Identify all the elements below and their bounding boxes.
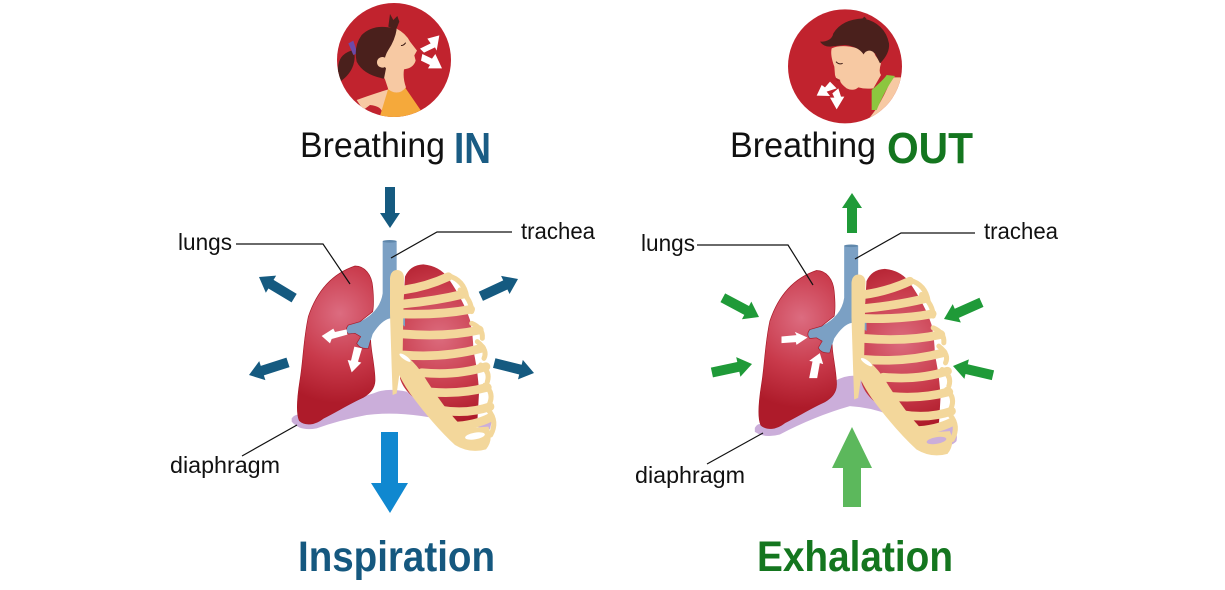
airflow arrows bbox=[781, 332, 823, 378]
label: trachea bbox=[855, 218, 1058, 259]
heading: Breathing OUT: OUT bbox=[887, 124, 973, 173]
label: diaphragm bbox=[635, 433, 763, 488]
diagram: lungs exhaling bbox=[755, 244, 957, 455]
right lung bbox=[861, 269, 940, 428]
arrow: air in through trachea bbox=[380, 187, 400, 228]
label: lungs: lungs bbox=[178, 229, 232, 255]
right lung bbox=[400, 264, 479, 424]
panel: breathing out bbox=[635, 9, 1058, 581]
panel: breathing in bbox=[170, 3, 595, 581]
trachea and bronchi bbox=[808, 244, 866, 353]
label: diaphragm bbox=[170, 425, 297, 478]
heading: Breathing IN bbox=[300, 124, 491, 173]
diaphragm bbox=[755, 376, 957, 447]
label: lungs: lungs bbox=[641, 230, 695, 256]
big arrow: diaphragm moves down bbox=[371, 432, 408, 513]
arrow: outward lower left bbox=[246, 353, 291, 385]
arrow: inward lower right bbox=[951, 356, 995, 385]
left lung bbox=[297, 266, 375, 424]
title: Inspiration: Inspiration bbox=[298, 533, 495, 581]
label: diaphragm: diaphragm bbox=[635, 462, 745, 488]
diaphragm bbox=[292, 390, 492, 429]
arrow: outward upper left bbox=[254, 268, 299, 307]
icon: air arrows out bbox=[817, 82, 844, 109]
label: trachea bbox=[391, 218, 595, 258]
label: lungs bbox=[178, 229, 350, 284]
title: Exhalation: Exhalation bbox=[757, 533, 953, 581]
label: lungs bbox=[641, 230, 813, 285]
rib cage bbox=[403, 276, 494, 435]
airflow arrows bbox=[322, 329, 362, 372]
label: trachea: trachea bbox=[521, 218, 595, 244]
label: trachea: trachea bbox=[984, 218, 1058, 244]
rib cage bbox=[865, 280, 955, 439]
arrow: inward upper left bbox=[718, 289, 764, 326]
arrow: inward upper right bbox=[940, 293, 986, 328]
label: diaphragm: diaphragm bbox=[170, 452, 280, 478]
heading: Breathing OUT bbox=[730, 124, 973, 173]
big arrow: diaphragm moves up bbox=[832, 427, 872, 507]
diagram: lungs inhaling bbox=[292, 240, 494, 451]
heading: Breathing IN: IN bbox=[454, 124, 491, 173]
icon: boy breathing out bbox=[788, 9, 905, 123]
icon: air arrows in bbox=[420, 35, 442, 68]
left lung bbox=[759, 270, 836, 429]
heading: Breathing IN: Breathing bbox=[300, 126, 445, 165]
arrow: outward lower right bbox=[492, 353, 536, 383]
icon: girl breathing in bbox=[337, 3, 451, 117]
arrow: air out through trachea bbox=[842, 193, 862, 233]
heading: Breathing OUT: Breathing bbox=[730, 126, 876, 165]
arrow: outward upper right bbox=[477, 270, 522, 305]
arrow: inward lower left bbox=[710, 354, 754, 382]
trachea and bronchi bbox=[346, 240, 405, 348]
